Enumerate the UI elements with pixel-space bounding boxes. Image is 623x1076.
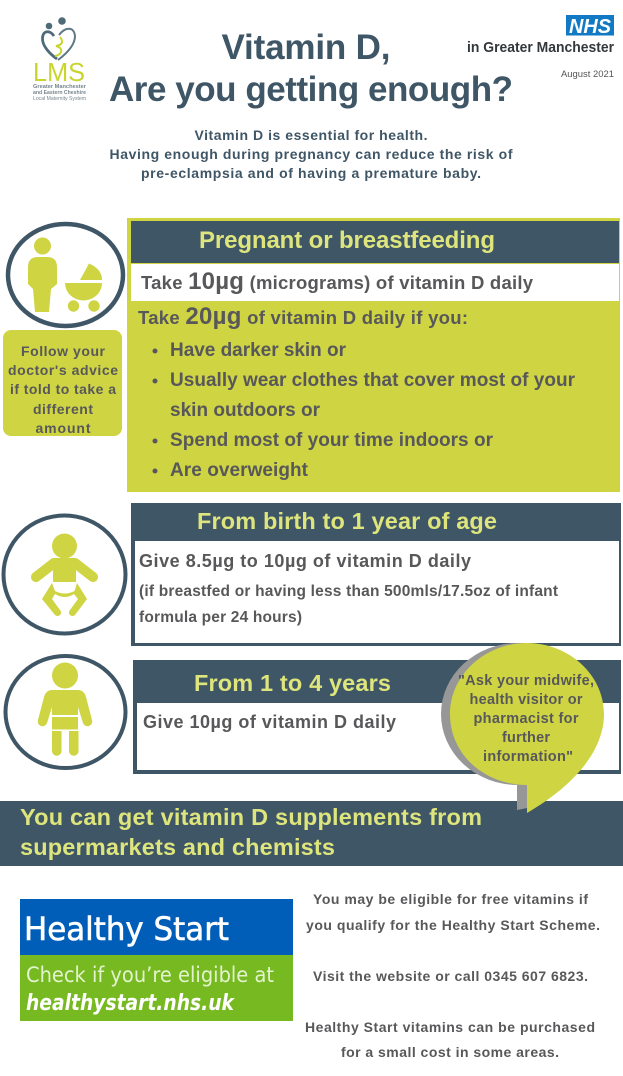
panel: from 1 to 4 years — [133, 660, 621, 774]
healthy start information — [305, 891, 600, 1060]
condition note: (if breastfed or having less than 500mls/17.5oz of infant — [139, 583, 558, 600]
dose: 1 to 4 years: Give 10µg of vitamin D daily — [143, 712, 396, 732]
intro text: Having enough during pregnancy can reduce the risk of — [110, 146, 513, 162]
icon: parent and pram — [8, 224, 123, 326]
icon: toddler — [6, 656, 126, 768]
risk factor list: Spend most of your time indoors or — [170, 430, 494, 451]
speech bubble: further — [502, 730, 550, 746]
logo: LMS — [33, 17, 87, 102]
risk factor list — [152, 340, 576, 481]
speech bubble: health visitor or — [470, 692, 583, 708]
title: Are you getting enough? — [109, 70, 513, 109]
heading: from birth: From birth to 1 year of age — [197, 508, 497, 534]
intro text — [110, 127, 513, 181]
healthy start information: for a small cost in some areas. — [341, 1044, 559, 1060]
healthy start information: you qualify for the Healthy Start Scheme. — [306, 917, 600, 933]
icon: baby — [4, 516, 126, 634]
healthy start information: You may be eligible for free vitamins if — [313, 891, 588, 907]
speech bubble: pharmacist for — [474, 711, 579, 727]
condition note: formula per 24 hours) — [139, 609, 302, 626]
title — [109, 28, 513, 109]
banner: where to get supplements: You can get vitamin D supplements from — [20, 804, 482, 830]
panel: from birth to 1 year — [131, 503, 621, 646]
intro text: Vitamin D is essential for health. — [194, 127, 428, 143]
risk factor list: skin outdoors or — [170, 400, 321, 421]
dose: 10 micrograms: Take 10µg (micrograms) of vitamin D daily — [141, 268, 534, 295]
healthy start banner: healthystart.nhs.uk — [26, 991, 235, 1016]
heading: pregnant or breastfeeding: Pregnant or breastfeeding — [199, 227, 495, 254]
logo: LMS: Greater Manchester — [33, 84, 87, 90]
panel: pregnant or breastfeeding — [127, 218, 620, 492]
speech bubble: "Ask your midwife, — [458, 673, 594, 689]
banner: where to get supplements — [0, 801, 623, 866]
healthy start information: Healthy Start vitamins can be purchased — [305, 1019, 595, 1035]
callout: doctor's advice: doctor's advice — [8, 362, 118, 378]
logo: LMS: and Eastern Cheshire — [33, 90, 87, 96]
logo: NHS in Greater Manchester — [467, 15, 614, 56]
condition note — [139, 583, 558, 626]
callout: doctor's advice — [3, 330, 122, 436]
speech bubble — [441, 643, 604, 813]
logo: LMS: Local Maternity System — [33, 96, 86, 102]
title: Vitamin D, — [222, 28, 390, 67]
callout: doctor's advice: amount — [36, 420, 91, 436]
logo: LMS: LMS — [33, 57, 85, 87]
dose: 20 micrograms: Take 20µg of vitamin D daily if you: — [138, 303, 468, 330]
risk factor list: Have darker skin or — [170, 340, 347, 361]
intro text: pre-eclampsia and of having a premature baby. — [141, 165, 481, 181]
date: August 2021 — [561, 69, 614, 79]
dose: birth to 1 year: Give 8.5µg to 10µg of vitamin D daily — [139, 551, 471, 571]
heading: 1 to 4 years: From 1 to 4 years — [194, 670, 391, 696]
callout: doctor's advice: Follow your — [21, 343, 106, 359]
logo: NHS in Greater Manchester: NHS — [569, 16, 612, 38]
callout: doctor's advice: different — [33, 401, 93, 417]
healthy start banner — [20, 899, 293, 1021]
healthy start banner: Check if you’re eligible at — [26, 963, 274, 987]
healthy start information: Visit the website or call 0345 607 6823. — [313, 968, 588, 984]
risk factor list: Usually wear clothes that cover most of your — [170, 370, 576, 391]
callout: doctor's advice: if told to take a — [10, 381, 116, 397]
healthy start banner: Healthy Start — [24, 910, 229, 948]
speech bubble: information" — [483, 749, 573, 765]
logo: NHS in Greater Manchester: in Greater Manchester — [467, 39, 614, 56]
banner: where to get supplements: supermarkets and chemists — [20, 834, 335, 860]
risk factor list: Are overweight — [170, 460, 309, 481]
